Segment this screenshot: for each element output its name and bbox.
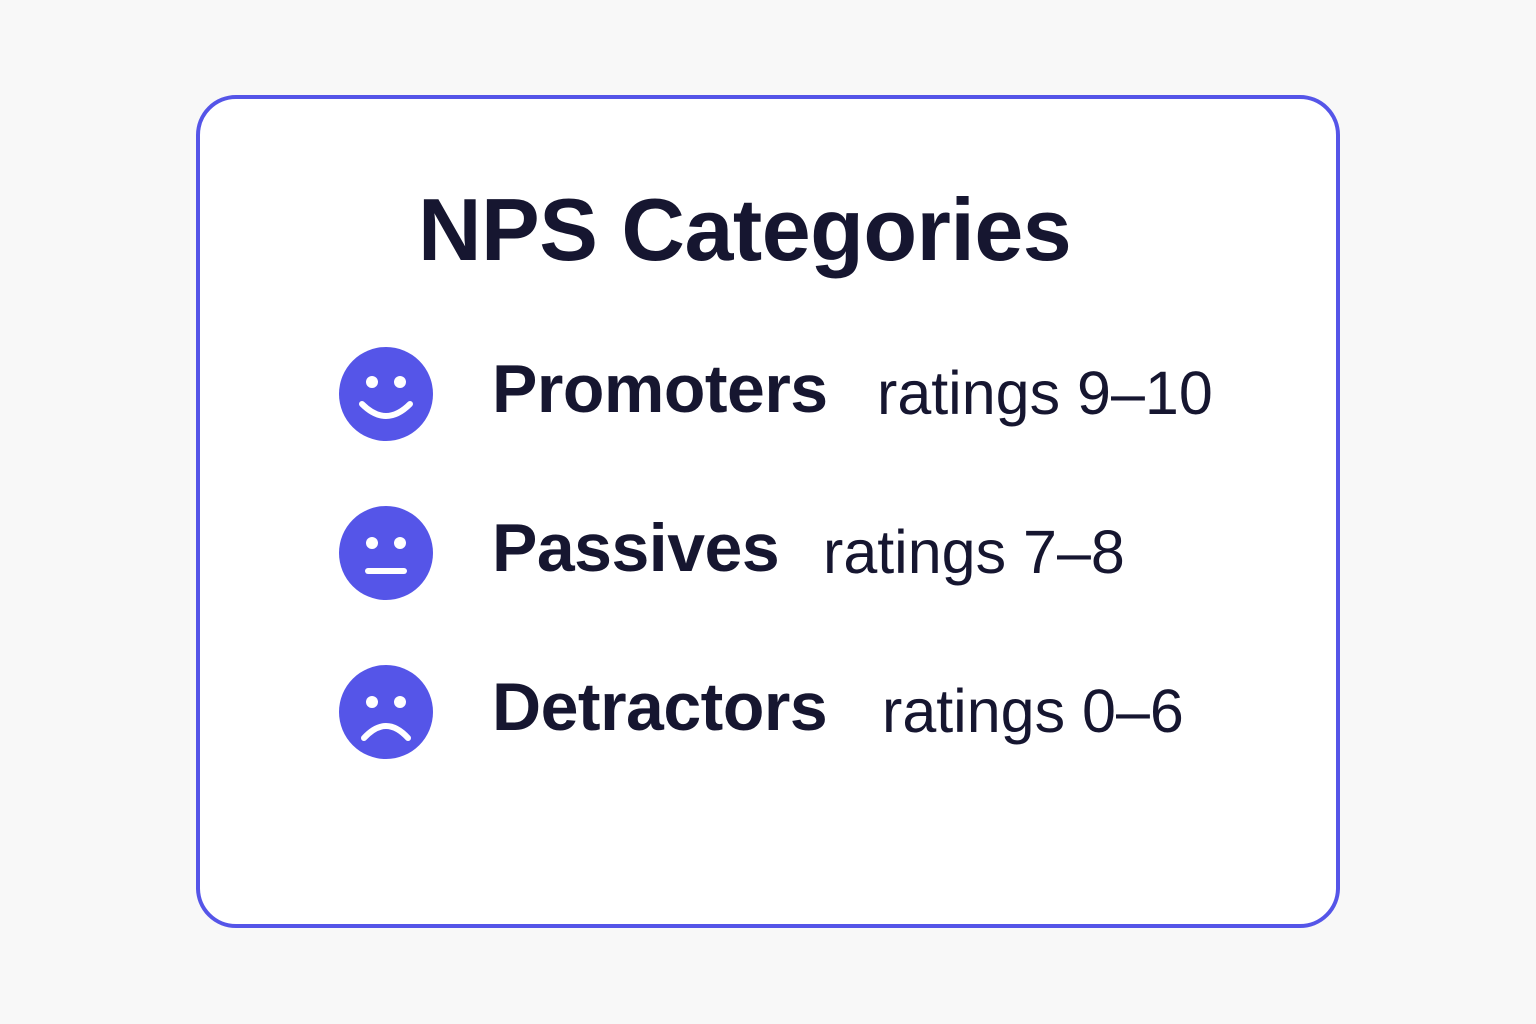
text: ratings 0-6: ratings 0–6	[882, 677, 1184, 745]
label: Detractors: Detractors	[492, 669, 827, 745]
title: NPS Categories	[418, 180, 1071, 279]
row: passives	[339, 506, 1125, 600]
row: detractors	[339, 665, 1184, 759]
text: ratings 9-10: ratings 9–10	[877, 359, 1213, 427]
panel: NPS card	[196, 95, 1340, 928]
label: Passives: Passives	[492, 510, 779, 586]
icon: smiley	[339, 347, 433, 441]
icon: sad face	[339, 665, 433, 759]
row: promoters	[339, 347, 1213, 441]
text: ratings 7-8: ratings 7–8	[823, 518, 1125, 586]
label: Promoters: Promoters	[492, 351, 828, 427]
icon: neutral face	[339, 506, 433, 600]
